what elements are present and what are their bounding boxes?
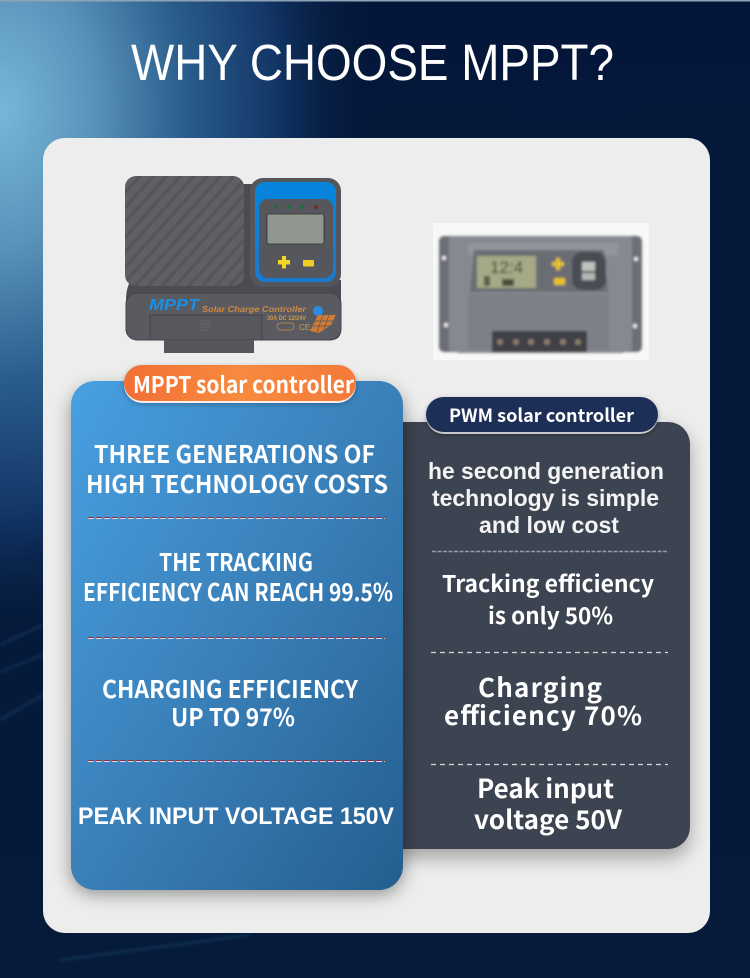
product name: Solar Charge Controller xyxy=(202,304,307,314)
textured left pad xyxy=(125,176,244,286)
MPPT point: technology: HIGH TECHNOLOGY COSTS xyxy=(86,465,388,500)
PWM point: charging efficiency xyxy=(444,668,642,733)
lower housing xyxy=(468,294,609,350)
PWM point: peak input voltage: Peak input xyxy=(477,769,614,806)
plus button xyxy=(278,256,290,268)
controller body xyxy=(126,280,341,353)
MPPT point: technology: THREE GENERATIONS OF xyxy=(94,435,375,470)
title: WHY CHOOSE MPPT? xyxy=(131,34,614,91)
MPPT point: charging efficiency: UP TO 97% xyxy=(171,698,295,733)
minus button xyxy=(303,260,314,266)
MPPT point: tracking efficiency: THE TRACKING xyxy=(159,543,313,578)
MPPT point: charging efficiency xyxy=(102,670,359,733)
PWM point: tracking efficiency: is only 50% xyxy=(488,597,613,631)
MPPT point: technology xyxy=(86,435,388,500)
PWM point: generation: and low cost xyxy=(479,512,619,538)
buttons xyxy=(552,258,564,270)
label: PWM solar controller: PWM solar controller xyxy=(449,402,634,428)
control fascia xyxy=(470,250,608,292)
PWM point: generation: technology is simple xyxy=(432,485,659,511)
lower label bar xyxy=(126,293,341,340)
MPPT point: peak input voltage: PEAK INPUT VOLTAGE 150V xyxy=(78,803,394,830)
screen module xyxy=(250,178,341,287)
photo backdrop xyxy=(433,223,649,360)
panel: MPPT column xyxy=(71,381,403,894)
PWM point: charging efficiency: efficiency 70% xyxy=(444,696,642,733)
PWM point: peak input voltage xyxy=(474,769,623,837)
PWM point: tracking efficiency xyxy=(442,565,654,631)
solar panel logo xyxy=(310,306,336,333)
USB port xyxy=(572,252,606,290)
product: PWM solar controller xyxy=(433,223,649,360)
rating: 30A DC 12/24V xyxy=(267,315,307,322)
MPPT point: tracking efficiency xyxy=(83,543,393,608)
LCD xyxy=(477,256,536,288)
MPPT logo: MPPT xyxy=(149,297,201,314)
housing xyxy=(449,236,632,353)
lower label bar: CE xyxy=(299,323,310,332)
PWM point: tracking efficiency: Tracking efficiency xyxy=(442,565,654,599)
PWM point: generation xyxy=(428,458,664,538)
mounting flanges xyxy=(439,236,642,352)
marks xyxy=(277,323,294,330)
label: PWM solar controller xyxy=(426,397,658,435)
product: MPPT solar controller xyxy=(125,176,341,353)
PWM point: charging efficiency: Charging xyxy=(478,668,602,705)
MPPT point: tracking efficiency: EFFICIENCY CAN REACH 99.5% xyxy=(83,573,393,608)
MPPT point: charging efficiency: CHARGING EFFICIENCY xyxy=(102,670,359,705)
PWM point: generation: he second generation xyxy=(428,458,664,484)
terminal block xyxy=(492,331,587,352)
product: PWM solar controller: 12:4 xyxy=(490,258,523,277)
connector tab xyxy=(164,340,254,353)
label: MPPT solar controller: MPPT solar controller xyxy=(133,366,355,400)
LCD display xyxy=(267,214,324,244)
panel: PWM column xyxy=(380,422,690,858)
panel: white card xyxy=(43,138,710,933)
PWM point: peak input voltage: voltage 50V xyxy=(474,800,623,837)
battery flap xyxy=(150,315,262,340)
status LEDs xyxy=(274,205,318,209)
